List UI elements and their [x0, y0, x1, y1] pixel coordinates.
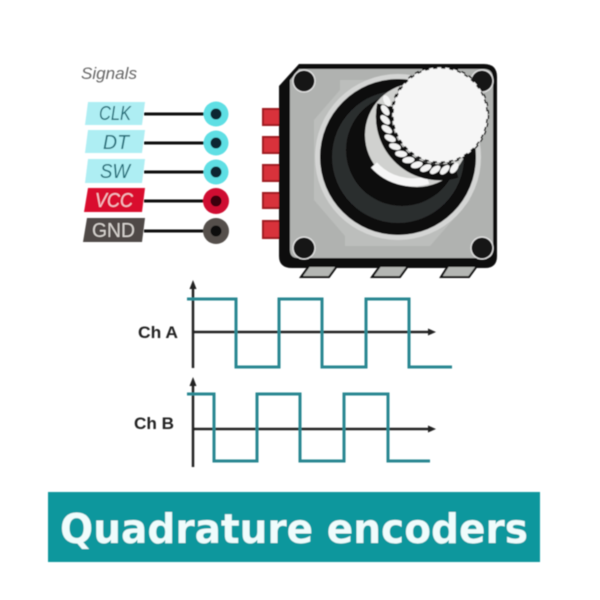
icon: rotary encoder — [263, 64, 497, 277]
signal: SW: SW — [100, 161, 132, 183]
signal: GND — [83, 218, 229, 244]
knob top — [392, 67, 488, 163]
knob knurling — [379, 94, 460, 176]
encoder pins — [263, 109, 280, 238]
heading: Signals: Signals — [81, 64, 137, 83]
signal: VCC: VCC — [95, 190, 133, 212]
panel: signal list — [83, 102, 229, 244]
bottom tabs — [301, 266, 477, 277]
chart: channel A — [138, 280, 452, 368]
signal: CLK: CLK — [99, 103, 132, 125]
chart: channel B — [134, 377, 436, 467]
label: Ch B: Ch B — [134, 414, 174, 433]
title banner: Quadrature encoders — [60, 505, 528, 553]
signal: SW — [85, 159, 228, 184]
signal: CLK — [85, 102, 228, 126]
knob base crescent — [320, 79, 476, 235]
encoder body — [279, 64, 497, 268]
signal: DT: DT — [103, 132, 131, 154]
signal: VCC — [84, 188, 229, 214]
mounting holes — [293, 70, 493, 259]
title banner — [48, 492, 540, 562]
knob inner shaft — [365, 83, 469, 187]
signal: GND: GND — [92, 220, 135, 242]
encoder face — [290, 69, 493, 258]
label: Ch A: Ch A — [138, 323, 178, 342]
signal: DT — [85, 130, 228, 156]
